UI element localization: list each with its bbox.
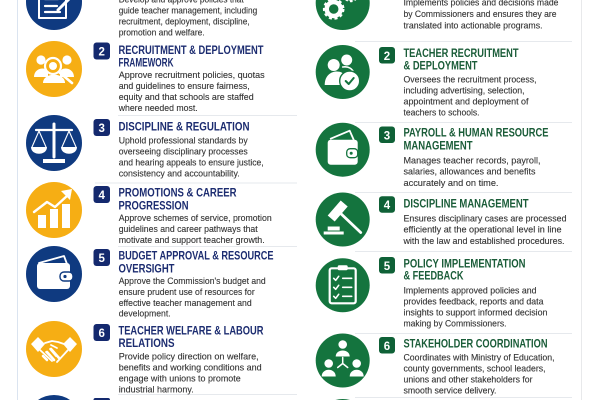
description: consistency and accountability.: [119, 167, 240, 178]
icon: people with check: [316, 45, 370, 99]
description: by Commissioners and ensures they are: [404, 8, 556, 19]
number badge: 6: [98, 328, 105, 340]
description: Oversees the recruitment process,: [404, 73, 536, 84]
item 3: payroll and human resource management: [316, 123, 549, 188]
heading: [118, 324, 264, 350]
description: [118, 69, 265, 113]
number badge: [379, 196, 395, 213]
item 7: top of the next circle, cut by the frame: [335, 399, 350, 400]
description: unions and other stakeholders for: [404, 374, 532, 385]
icon: rising bar chart: [26, 182, 82, 238]
description: efficiently at the operational level in line: [404, 224, 562, 235]
number badge: [379, 257, 395, 274]
description: insights to support informed decision: [404, 306, 548, 317]
description: county governments, school leaders,: [404, 363, 546, 374]
heading: [118, 187, 237, 212]
number badge: 4: [384, 200, 391, 212]
description: promotion and welfare.: [119, 26, 205, 38]
description: Coordinates with Ministry of Education,: [404, 351, 554, 362]
item 7: top of the next circle and badge, cut by the frame: [38, 395, 110, 400]
heading: POLICY IMPLEMENTATION: [404, 258, 526, 271]
heading: & FEEDBACK: [404, 270, 464, 283]
icon: clipped circle: [38, 395, 70, 400]
heading: PROGRESSION: [118, 199, 188, 212]
heading: [118, 250, 274, 275]
description: [119, 134, 264, 178]
number badge: [94, 398, 110, 400]
panel: commissioners column: [26, 0, 274, 400]
description: development.: [119, 308, 171, 319]
description: [119, 350, 262, 394]
heading: OVERSIGHT: [118, 262, 174, 275]
description: [404, 0, 558, 30]
description: [403, 212, 566, 246]
description: guide teacher management, including: [119, 4, 257, 16]
description: effective teacher management and: [119, 297, 252, 308]
description: provides feedback, reports and data: [404, 295, 544, 306]
number badge: [94, 186, 110, 203]
description: Ensures disciplinary cases are processed: [404, 212, 566, 223]
heading: DISCIPLINE & REGULATION: [118, 120, 250, 134]
description: accurately and on time.: [404, 177, 498, 188]
item 6: teacher welfare and labour relations: [26, 321, 264, 394]
heading: MANAGEMENT: [404, 139, 472, 152]
description: Approve recruitment policies, quotas: [119, 69, 265, 80]
description: appointment and deployment of: [404, 95, 529, 106]
icon: people and magnifier: [26, 41, 82, 97]
description: Approve schemes of service, promotion: [119, 212, 272, 223]
heading: & DEPLOYMENT: [404, 59, 478, 72]
heading: [404, 127, 549, 152]
description: [404, 154, 540, 188]
heading: RECRUITMENT & DEPLOYMENT: [118, 44, 264, 57]
description: including advertising, selection,: [404, 84, 524, 95]
item 1: policy development: [26, 0, 257, 38]
description: [119, 0, 257, 38]
description: Approve the Commission's budget and: [119, 275, 266, 286]
number badge: [379, 337, 395, 354]
item 4: promotions and career progression: [26, 182, 272, 245]
heading: PROMOTIONS & CAREER: [118, 187, 237, 200]
number badge: [379, 126, 395, 143]
description: motivate and support teacher growth.: [119, 234, 265, 245]
heading: RELATIONS: [118, 337, 175, 350]
heading: STAKEHOLDER COORDINATION: [404, 337, 548, 350]
description: guidelines and career pathways that: [119, 223, 258, 234]
number badge: [94, 324, 110, 341]
number badge: [94, 42, 110, 60]
description: ensure prudent use of resources for: [119, 286, 255, 297]
description: teachers to schools.: [404, 106, 480, 117]
icon: connected people: [316, 334, 370, 388]
heading: [404, 258, 526, 283]
description: overseeing disciplinary processes: [119, 145, 248, 156]
description: where needed most.: [118, 102, 198, 113]
number badge: [94, 119, 110, 136]
number badge: 3: [384, 130, 390, 142]
description: with the law and established procedures.: [403, 235, 564, 246]
heading: PAYROLL & HUMAN RESOURCE: [404, 127, 549, 140]
number badge: 6: [384, 341, 390, 353]
description: benefits and working conditions and: [119, 361, 262, 372]
number badge: 2: [98, 46, 105, 58]
description: industrial harmony.: [119, 383, 194, 394]
description: [119, 275, 266, 319]
heading: [118, 44, 264, 70]
heading: BUDGET APPROVAL & RESOURCE: [118, 250, 274, 263]
heading: TEACHER WELFARE & LABOUR: [118, 324, 264, 337]
description: Provide policy direction on welfare,: [119, 350, 259, 361]
description: recruitment, deployment, discipline,: [119, 16, 250, 26]
description: smooth service delivery.: [404, 385, 496, 396]
description: equity and that schools are staffed: [119, 91, 254, 102]
description: making by Commissioners.: [404, 318, 506, 329]
number badge: 5: [98, 253, 105, 265]
icon: wallet: [26, 246, 82, 302]
item 6: stakeholder coordination: [316, 334, 554, 396]
description: Uphold professional standards by: [119, 134, 248, 145]
description: translated into actionable programs.: [404, 19, 542, 30]
description: engage with unions to promote: [119, 372, 241, 383]
heading: FRAMEWORK: [118, 56, 174, 70]
description: [119, 212, 272, 245]
number badge: [94, 249, 110, 266]
icon: wallet: [316, 123, 370, 177]
icon: gears: [316, 0, 370, 30]
description: [404, 284, 548, 329]
description: salaries, allowances and benefits: [404, 166, 536, 177]
description: Manages teacher records, payroll,: [404, 154, 540, 165]
item 4: discipline management: [316, 192, 566, 246]
item 2: recruitment and deployment framework: [26, 41, 265, 113]
icon: document and pen: [26, 0, 82, 30]
description: [404, 73, 536, 117]
heading: TEACHER RECRUITMENT: [404, 47, 518, 60]
description: Implements approved policies and: [404, 284, 536, 295]
description: [404, 351, 554, 396]
icon: gavel: [316, 192, 370, 246]
heading: [404, 47, 518, 72]
icon: scales of justice: [26, 115, 82, 171]
icon: handshake: [26, 321, 82, 377]
item 1: policy execution: [316, 0, 558, 30]
item 3: discipline and regulation: [26, 115, 264, 178]
panel: secretariat column: [316, 0, 566, 400]
number badge: [379, 47, 395, 64]
icon: clipboard checklist: [316, 258, 370, 312]
number badge: 4: [98, 190, 105, 202]
item 2: teacher recruitment and deployment: [316, 45, 536, 117]
number badge: 2: [384, 51, 390, 63]
number badge: 3: [98, 123, 105, 135]
number badge: 5: [384, 261, 391, 273]
description: and guidelines to ensure fairness,: [119, 80, 250, 91]
item 5: policy implementation and feedback: [316, 257, 548, 329]
item 5: budget approval and resource oversight: [26, 246, 274, 319]
description: and hearing appeals to ensure justice,: [119, 156, 264, 167]
heading: DISCIPLINE MANAGEMENT: [404, 197, 528, 210]
